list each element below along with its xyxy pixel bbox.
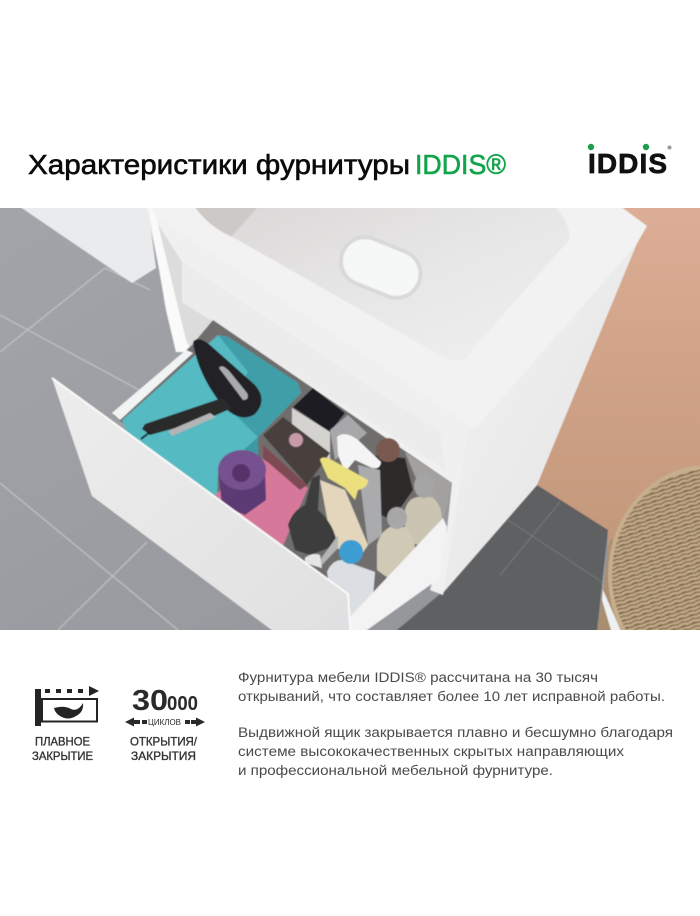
basin: [195, 208, 568, 328]
drawer left rim: [112, 350, 193, 420]
cosmetics box: [263, 417, 330, 490]
drawer side rim: [350, 518, 448, 630]
drawer front panel: [52, 378, 351, 640]
cabinet front face: [145, 200, 476, 595]
wall: [537, 208, 700, 552]
label: opening and closing: ОТКРЫТИЯ/: [130, 734, 198, 748]
label: soft close: [32, 734, 93, 763]
text block: soft close description: Выдвижной ящик закрывается плавно и бесшумно благодаря: [238, 725, 673, 741]
blue-cap bottle: [327, 540, 375, 622]
pink box: [214, 456, 308, 548]
brown bottle: [370, 438, 413, 520]
drawer interior: [113, 320, 442, 592]
label: soft close: ПЛАВНОЕ: [35, 734, 90, 748]
dark box: [293, 388, 345, 432]
grey block: [330, 415, 367, 460]
label: opening and closing: [130, 734, 198, 763]
yellow trigger spray: [320, 458, 368, 560]
white card: [292, 408, 330, 460]
icon: 30000 cycles: 30: [132, 685, 168, 717]
icon: 30000 cycles: ЦИКЛОВ: [148, 718, 181, 727]
neighbouring cabinet: [21, 208, 156, 284]
dark pump bottle: [288, 475, 338, 565]
cabinet niche: [150, 209, 212, 352]
text block: durability: Фурнитура мебели IDDIS® рассчитана на 30 тысяч: [238, 670, 598, 686]
icon: soft close: [35, 686, 99, 726]
basket: [597, 466, 700, 630]
cabinet side: [442, 236, 640, 594]
teal box: [122, 335, 301, 500]
photo: bathroom cabinet with open drawer: [0, 208, 700, 630]
logo: IDDIS: IDDIS: [588, 148, 667, 179]
title: Характеристики фурнитуры: [28, 149, 410, 180]
text block: soft close description: и профессиональной мебельной фурнитуре.: [238, 763, 553, 779]
label: soft close: ЗАКРЫТИЕ: [32, 749, 93, 763]
title: IDDIS®: [415, 149, 506, 180]
text block: durability: [238, 670, 665, 705]
drain: [340, 236, 422, 300]
text block: soft close description: системе высококачественных скрытых направляющих: [238, 744, 624, 760]
purple jar: [218, 450, 266, 515]
hair dryer: [141, 339, 262, 439]
text block: durability: открываний, что составляет более 10 лет исправной работы.: [238, 689, 665, 705]
icon: 30000 cycles: 000: [167, 693, 198, 715]
beige right bottle: [405, 474, 442, 545]
white trigger spray: [337, 434, 382, 545]
floor: dark tiles: [396, 485, 608, 630]
countertop: [190, 208, 648, 422]
label: opening and closing: ЗАКРЫТИЯ: [131, 749, 196, 763]
beige left bottle: [377, 507, 415, 578]
icon: 30000 cycles: [125, 685, 205, 727]
floor: light tiles: [0, 208, 609, 630]
text block: soft close description: [238, 725, 673, 779]
white bottle: [305, 554, 322, 568]
